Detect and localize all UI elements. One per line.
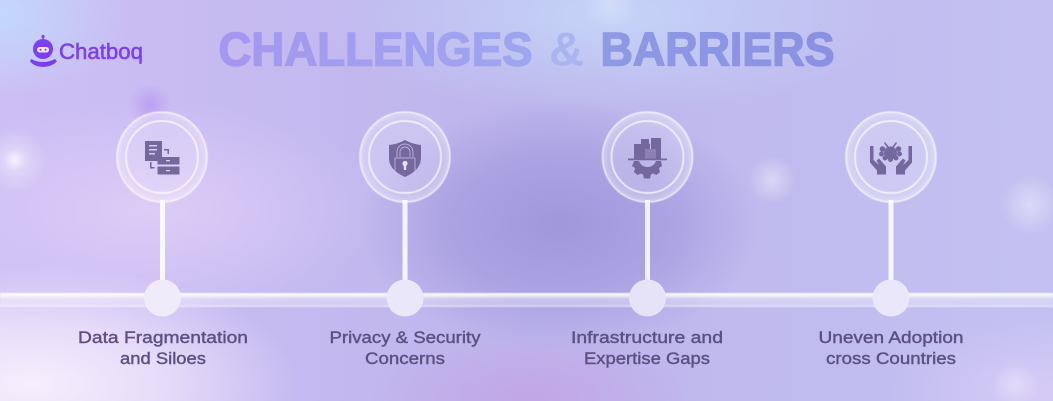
connector xyxy=(402,200,408,282)
node xyxy=(872,280,910,316)
node xyxy=(386,280,424,316)
icon ring xyxy=(602,112,692,202)
connector xyxy=(888,200,894,282)
icon: hands holding gear xyxy=(870,142,912,174)
logo wordmark: Chatboq xyxy=(59,39,143,64)
title: CHALLENGES xyxy=(218,22,532,76)
label: Concerns xyxy=(365,350,445,368)
node xyxy=(629,280,666,316)
label: Privacy & Security xyxy=(330,329,481,347)
step 3: infrastructure and expertise xyxy=(571,112,723,368)
icon: robot logo xyxy=(30,35,57,67)
step 1: data fragmentation xyxy=(78,112,248,368)
label: and Siloes xyxy=(120,350,206,368)
label: Data Fragmentation xyxy=(78,329,248,347)
title: & xyxy=(549,22,584,76)
icon ring xyxy=(117,112,207,202)
timeline band xyxy=(0,293,1053,307)
connector xyxy=(645,200,650,282)
label: Uneven Adoption xyxy=(818,329,964,347)
connector xyxy=(160,200,165,282)
step 4: uneven adoption xyxy=(818,112,964,368)
label: Expertise Gaps xyxy=(584,350,710,368)
label: cross Countries xyxy=(826,350,956,368)
title xyxy=(218,22,834,76)
node xyxy=(144,280,181,316)
icon: shield with lock xyxy=(389,140,421,177)
step 2: privacy and security xyxy=(330,112,481,368)
label: Infrastructure and xyxy=(571,329,723,347)
icon: documents and folders xyxy=(145,141,180,174)
icon: buildings on gear xyxy=(628,138,667,178)
title: BARRIERS xyxy=(600,22,834,76)
logo: Chatboq xyxy=(30,35,143,67)
icon ring xyxy=(360,112,450,202)
icon ring xyxy=(846,112,936,202)
